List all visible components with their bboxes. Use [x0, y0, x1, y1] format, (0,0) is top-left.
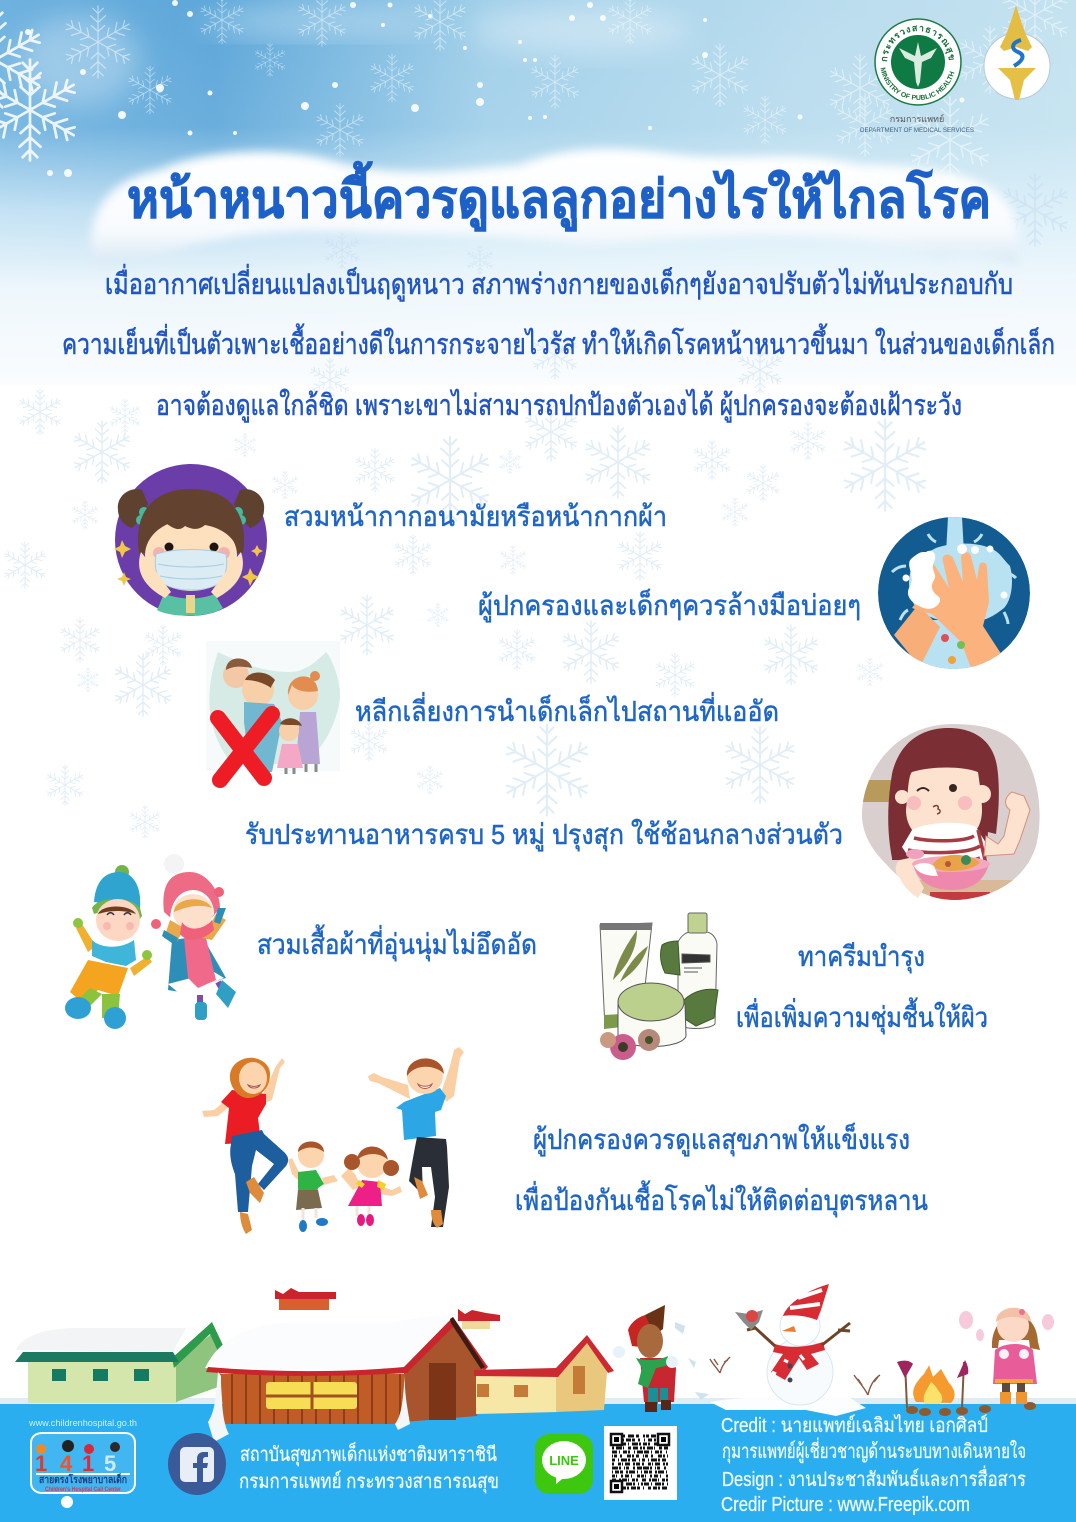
text: moisturizer: เพื่อเพิ่มความชุ่มชื้นให้ผิว — [736, 997, 988, 1035]
logo: 1415 call center: 4 — [60, 1451, 73, 1476]
text: avoid crowded places: หลีกเลี่ยงการนำเด็กเล็กไปสถานที่แออัด — [355, 692, 779, 727]
logo: 1415 call center: Children's Hospital Call Center — [45, 1487, 122, 1493]
logo caption — [860, 113, 975, 134]
icon: children in winter clothes — [65, 854, 236, 1029]
icon: happy family jumping — [202, 1047, 464, 1234]
icon: LINE: LINE — [549, 1453, 579, 1468]
title: หน้าหนาวนี้ควรดูแลลูกอย่างไรให้ไกลโรค — [127, 161, 991, 232]
text: website: www.childrenhospital.go.th — [28, 1418, 137, 1428]
logo: 1415 call center: 1 — [82, 1451, 94, 1476]
footer bar — [0, 1403, 1076, 1522]
logo: 1415 call center: 1 — [35, 1451, 47, 1476]
logo caption: DEPARTMENT OF MEDICAL SERVICES — [860, 127, 975, 134]
snow cloud behind title — [92, 149, 1019, 265]
logo: 1415 call center: 5 — [104, 1451, 116, 1476]
text: eat 5 food groups: รับประทานอาหารครบ 5 หมู่ ปรุงสุก ใช้ช้อนกลางส่วนตัว — [245, 818, 843, 852]
icon: skincare products — [600, 913, 718, 1060]
text: credits: Credir Picture : www.Freepik.com — [721, 1494, 970, 1516]
QR code — [604, 1426, 677, 1500]
logo: 1415 call center — [31, 1433, 135, 1508]
text: moisturizer: ทาครีมบำรุง — [798, 941, 925, 974]
intro paragraph — [62, 264, 1055, 423]
text: moisturizer — [736, 941, 988, 1035]
icon: facebook — [168, 1433, 226, 1495]
illustration: bare twigs — [710, 1357, 880, 1395]
text: wear a mask: สวมหน้ากากอนามัยหรือหน้ากากผ้า — [284, 501, 667, 532]
icon: girl wearing mask — [114, 464, 267, 616]
logo: 1415 call center: สายตรงโรงพยาบาลเด็ก — [39, 1472, 127, 1486]
text: parents stay healthy: ผู้ปกครองควรดูแลสุขภาพให้แข็งแรง — [533, 1122, 910, 1157]
logo: Ministry of Public Health — [860, 18, 975, 134]
text: institute name: สถาบันสุขภาพเด็กแห่งชาติมหาราชินี — [240, 1441, 497, 1467]
illustration: boy with snowball — [613, 1305, 709, 1412]
icon: LINE — [535, 1434, 593, 1494]
logo caption: กรมการแพทย์ — [890, 113, 944, 124]
icon: hand washing — [878, 517, 1030, 678]
text: wash hands: ผู้ปกครองและเด็กๆควรล้างมือบ่อยๆ — [478, 588, 861, 623]
text: institute name: กรมการแพทย์ กระทรวงสาธารณสุข — [239, 1470, 499, 1494]
text: credits — [721, 1414, 1026, 1516]
text: credits: Credit : นายแพทย์เฉลิมไทย เอกศิลป์ — [721, 1414, 988, 1437]
illustration: snowman — [710, 1284, 866, 1416]
illustration: village houses — [15, 1288, 614, 1442]
text: institute name — [239, 1441, 499, 1494]
text: warm clothes: สวมเสื้อผ้าที่อุ่นนุ่มไม่อึดอัด — [257, 924, 537, 962]
text: parents stay healthy — [515, 1122, 928, 1218]
logo: children's institute — [984, 5, 1050, 100]
illustration: girl and campfire — [897, 1308, 1054, 1416]
icon: girl eating healthy food — [860, 720, 1040, 904]
icon: crowded family crossed out — [206, 641, 340, 780]
text: parents stay healthy: เพื่อป้องกันเชื้อโรคไม่ให้ติดต่อบุตรหลาน — [515, 1180, 928, 1218]
logo: Ministry of Public Health: กระทรวงสาธารณสุข — [882, 25, 954, 62]
logo: Ministry of Public Health: MINISTRY OF PUBLIC HEALTH — [880, 67, 954, 100]
red X — [218, 714, 272, 780]
